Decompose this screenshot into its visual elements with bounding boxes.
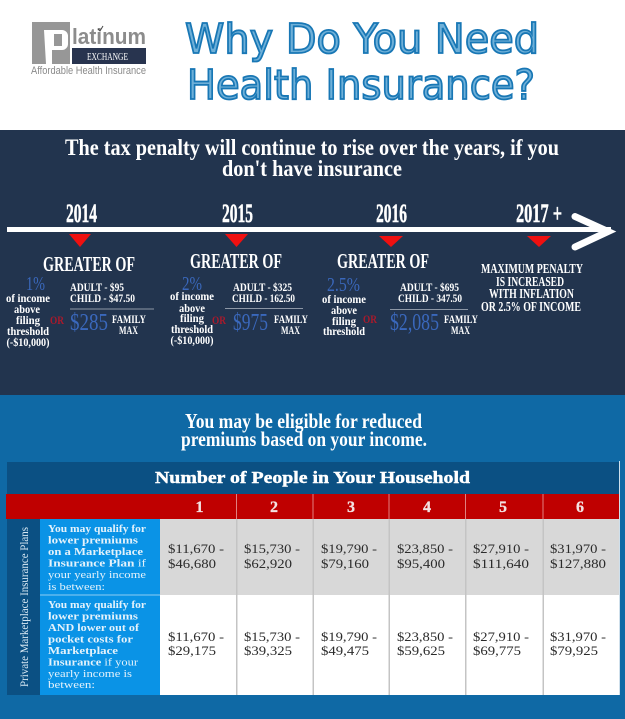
title: Health Insurance? bbox=[187, 61, 535, 109]
penalty block: 2014: above bbox=[14, 302, 41, 316]
heading: reduced premiums bbox=[181, 409, 427, 451]
year: 2014: 2014 bbox=[66, 199, 97, 228]
row 2: lower premiums and out of pocket costs: $23,850 - bbox=[397, 630, 453, 644]
year: 2017 and later: 2017 + bbox=[516, 199, 562, 228]
penalty block: 2015: CHILD - 162.50 bbox=[232, 291, 295, 305]
row 1: lower premiums: $15,730 - bbox=[244, 542, 300, 556]
header row: household sizes: 1 bbox=[196, 499, 204, 516]
row 1: lower premiums: $11,670 - bbox=[168, 542, 224, 556]
row 2: lower premiums and out of pocket costs: You may qualify for bbox=[48, 600, 146, 611]
penalty block: 2016: 2.5% bbox=[327, 274, 360, 296]
penalty block: 2017 and later: IS INCREASED bbox=[496, 274, 564, 289]
penalty block: 2015: MAX bbox=[281, 323, 300, 337]
logo: Platinum Exchange: Affordable Health Insurance bbox=[31, 65, 146, 77]
panel: reduced premiums bbox=[0, 395, 625, 719]
penalty block: 2017 and later: MAXIMUM PENALTY bbox=[481, 261, 583, 276]
row 1: lower premiums: lower premiums bbox=[48, 536, 138, 546]
penalty block: 2016: MAX bbox=[451, 323, 470, 337]
row 1: lower premiums: $23,850 - bbox=[397, 542, 453, 556]
row 1: lower premiums: $19,790 - bbox=[321, 542, 377, 556]
row 2: lower premiums and out of pocket costs: Insurance if your bbox=[48, 658, 139, 668]
penalty block: 2016: threshold bbox=[323, 324, 365, 338]
logo: Platinum Exchange bbox=[31, 22, 146, 77]
row 2: lower premiums and out of pocket costs: between: bbox=[48, 680, 95, 691]
heading: tax penalty bbox=[65, 135, 559, 182]
penalty block: 2014: OR bbox=[50, 313, 64, 327]
penalty block: 2016: $2,085 bbox=[390, 310, 439, 336]
penalty block: 2016: ADULT - $695 bbox=[400, 280, 459, 294]
penalty block: 2014: GREATER OF bbox=[43, 252, 135, 276]
penalty block: 2014: FAMILY bbox=[112, 312, 146, 326]
row 1: lower premiums: $62,920 bbox=[244, 557, 292, 571]
row 1: lower premiums: $31,970 - bbox=[550, 542, 606, 556]
row 2: lower premiums and out of pocket costs: $19,790 - bbox=[321, 630, 377, 644]
year: 2017 and later bbox=[516, 199, 562, 247]
year: 2014 bbox=[66, 199, 97, 247]
year: 2015: 2015 bbox=[222, 199, 253, 228]
penalty block: 2015: GREATER OF bbox=[190, 249, 282, 273]
penalty block: 2014 bbox=[6, 252, 154, 349]
row 2: lower premiums and out of pocket costs: $59,625 bbox=[397, 644, 445, 658]
header row: household sizes: 4 bbox=[423, 499, 431, 516]
penalty block: 2016: GREATER OF bbox=[337, 249, 429, 273]
header row: household sizes: 2 bbox=[270, 499, 278, 516]
row 1: lower premiums: your yearly income bbox=[48, 570, 146, 581]
penalty block: 2016: CHILD - 347.50 bbox=[398, 291, 462, 305]
heading: tax penalty: don't have insurance bbox=[222, 156, 402, 182]
penalty block: 2014: threshold bbox=[7, 324, 49, 338]
row 1: lower premiums: $27,910 - bbox=[473, 542, 529, 556]
penalty block: 2016 bbox=[322, 249, 478, 338]
penalty block: 2015: (-$10,000) bbox=[170, 333, 214, 347]
logo: Platinum Exchange: latinum bbox=[72, 24, 146, 49]
row 1: lower premiums bbox=[40, 519, 619, 595]
row 2: lower premiums and out of pocket costs: $11,670 - bbox=[168, 630, 224, 644]
penalty block: 2014: CHILD - $47.50 bbox=[70, 291, 135, 305]
row 2: lower premiums and out of pocket costs: AND lower out of bbox=[48, 623, 140, 634]
row 2: lower premiums and out of pocket costs: pocket costs for bbox=[48, 634, 133, 646]
year: 2015 bbox=[222, 199, 253, 247]
penalty block: 2015: FAMILY bbox=[274, 312, 308, 326]
row 1: lower premiums: $95,400 bbox=[397, 557, 445, 571]
row 2: lower premiums and out of pocket costs: $31,970 - bbox=[550, 630, 606, 644]
penalty block: 2014: filing bbox=[16, 313, 40, 327]
row 2: lower premiums and out of pocket costs: $79,925 bbox=[550, 644, 598, 658]
row 2: lower premiums and out of pocket costs: $15,730 - bbox=[244, 630, 300, 644]
penalty block: 2014: $285 bbox=[70, 310, 108, 336]
penalty block: 2015: $975 bbox=[233, 310, 268, 336]
year: 2016 bbox=[376, 199, 407, 247]
penalty block: 2014: of income bbox=[6, 291, 51, 305]
panel: header bbox=[0, 0, 625, 130]
header row: household sizes: 3 bbox=[347, 499, 355, 516]
panel: tax penalty timeline bbox=[0, 130, 625, 395]
row 1: lower premiums: $46,680 bbox=[168, 557, 216, 571]
penalty block: 2015: ADULT - $325 bbox=[233, 280, 292, 294]
year: 2016: 2016 bbox=[376, 199, 407, 228]
penalty block: 2016: FAMILY bbox=[444, 312, 478, 326]
penalty block: 2015: filing bbox=[180, 311, 204, 325]
row label: private marketplace insurance plans bbox=[7, 519, 40, 695]
row 2: lower premiums and out of pocket costs: lower premiums bbox=[48, 612, 138, 622]
penalty block: 2017 and later: OR 2.5% OF INCOME bbox=[481, 299, 581, 314]
title: Why Do You Need bbox=[185, 15, 539, 63]
penalty block: 2015: OR bbox=[212, 313, 226, 327]
row 2: lower premiums and out of pocket costs: $49,475 bbox=[321, 644, 369, 658]
penalty block: 2017 and later bbox=[481, 261, 583, 314]
row 2: lower premiums and out of pocket costs: $29,175 bbox=[168, 644, 216, 658]
row 2: lower premiums and out of pocket costs: Marketplace bbox=[48, 646, 118, 657]
row 2: lower premiums and out of pocket costs: $69,775 bbox=[473, 644, 521, 658]
title bbox=[185, 15, 539, 109]
arrow: timeline bbox=[7, 216, 611, 247]
header row: household sizes: 6 bbox=[576, 499, 584, 516]
heading: tax penalty: The tax penalty will continue to rise over the years, if you bbox=[65, 135, 559, 161]
penalty block: 2015: above bbox=[179, 301, 206, 315]
penalty block: 2016: filing bbox=[332, 314, 356, 328]
penalty block: 2014: 1% bbox=[26, 273, 45, 295]
table: income by household size bbox=[6, 461, 620, 695]
penalty block: 2014: (-$10,000) bbox=[6, 335, 50, 349]
row 1: lower premiums: on a Marketplace bbox=[48, 547, 143, 558]
header row: household sizes bbox=[6, 494, 619, 519]
row 2: lower premiums and out of pocket costs: $27,910 - bbox=[473, 630, 529, 644]
penalty block: 2015 bbox=[170, 249, 308, 347]
heading: reduced premiums: premiums based on your income. bbox=[181, 427, 427, 451]
row 1: lower premiums: Insurance Plan if bbox=[48, 558, 147, 570]
row 1: lower premiums: $111,640 bbox=[473, 557, 529, 571]
logo: Platinum Exchange: EXCHANGE bbox=[87, 51, 128, 63]
heading: reduced premiums: You may be eligible for reduced bbox=[185, 409, 422, 433]
row 1: lower premiums: You may qualify for bbox=[48, 524, 146, 535]
row 2: lower premiums and out of pocket costs bbox=[40, 595, 619, 695]
penalty block: 2017 and later: WITH INFLATION bbox=[489, 286, 574, 301]
row 1: lower premiums: $127,880 bbox=[550, 557, 606, 571]
row 2: lower premiums and out of pocket costs: yearly income is bbox=[48, 669, 132, 680]
penalty block: 2016: OR bbox=[363, 312, 377, 326]
row 2: lower premiums and out of pocket costs: $39,325 bbox=[244, 644, 292, 658]
penalty block: 2014: ADULT - $95 bbox=[70, 280, 124, 294]
penalty block: 2015: of income bbox=[170, 289, 215, 303]
header row: household sizes: 5 bbox=[499, 499, 507, 516]
penalty block: 2015: 2% bbox=[182, 273, 202, 295]
row 1: lower premiums: $79,160 bbox=[321, 557, 369, 571]
penalty block: 2016: of income bbox=[322, 292, 367, 306]
penalty block: 2014: MAX bbox=[119, 323, 138, 337]
row 1: lower premiums: is between: bbox=[48, 582, 105, 593]
table title: Number of People in Your Household bbox=[155, 468, 470, 487]
row label: private marketplace insurance plans: Private Marketplace Insurance Plans bbox=[17, 527, 31, 687]
penalty block: 2016: above bbox=[331, 303, 358, 317]
penalty block: 2015: threshold bbox=[171, 322, 213, 336]
